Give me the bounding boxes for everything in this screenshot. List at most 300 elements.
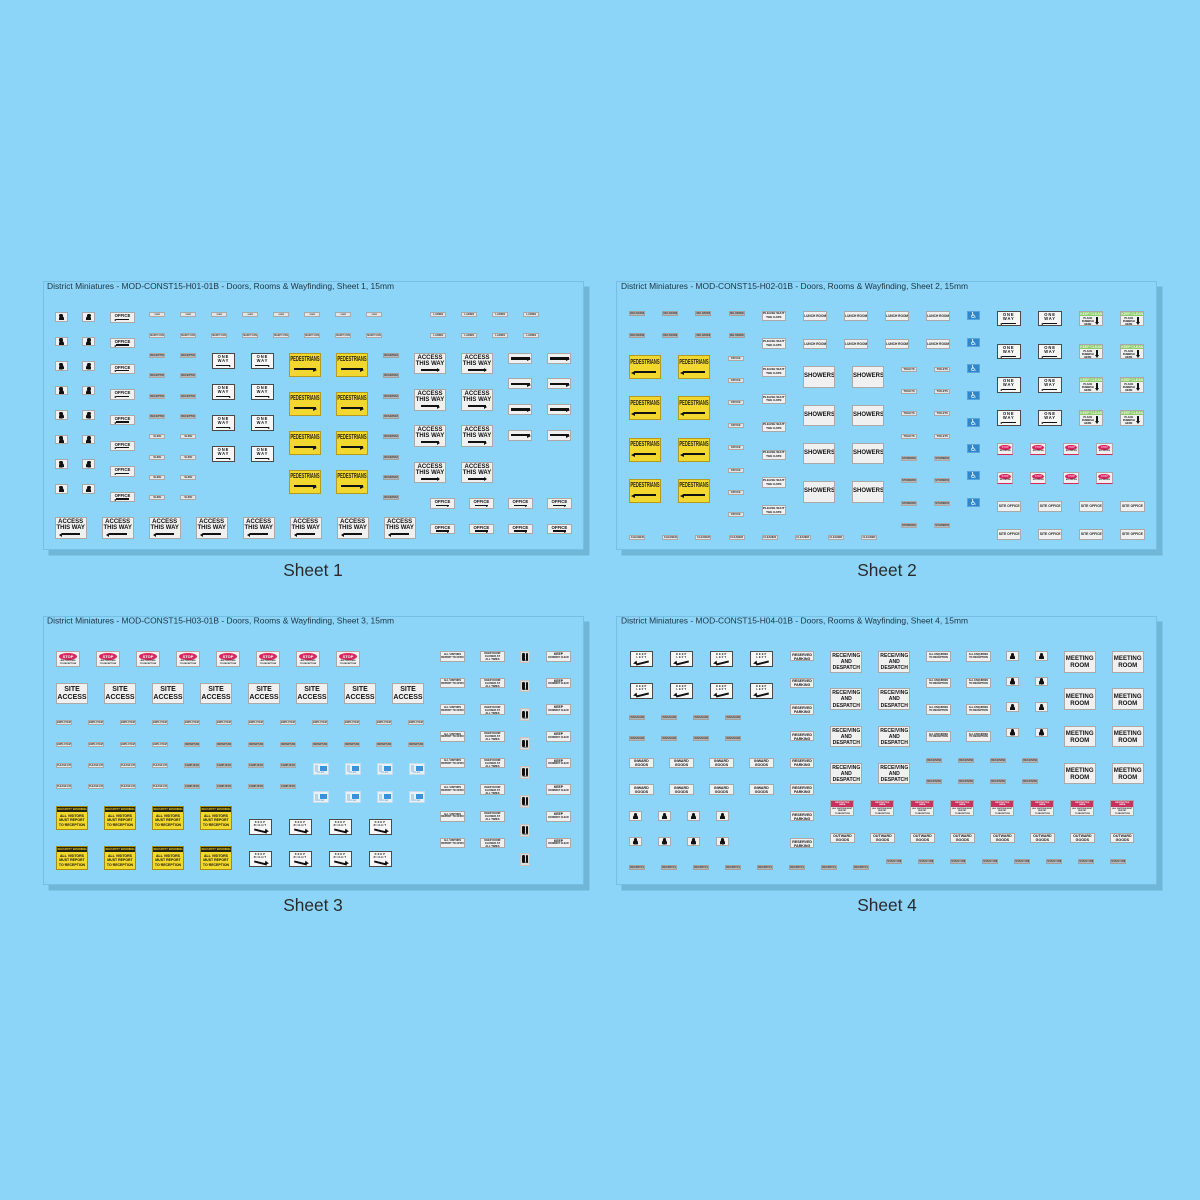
all enquiries signs xyxy=(926,651,991,742)
sheet 4 title: District Miniatures - MOD-CONST15-H04-01B - Doors, Rooms & Wayfinding, Sheet 4, 15mm xyxy=(620,616,968,626)
all enquiries signs: TO RECEPTION xyxy=(929,656,948,658)
toilets and storeroom labels: TOILETS xyxy=(937,390,948,393)
despatch labels: DESPATCH xyxy=(758,866,773,869)
keep doorway clear signs: KEEP xyxy=(554,679,563,683)
lunch room signs: LUNCH ROOM xyxy=(927,342,949,346)
keep door closed signs: CLOSED AT xyxy=(485,842,500,845)
office labels: OFFICE xyxy=(731,357,741,360)
meeting room signs: ROOM xyxy=(1070,700,1089,707)
keep clean signs: RUBBISH xyxy=(1082,386,1094,389)
restricted area signs: REPORT xyxy=(878,810,886,812)
tiny employees labels: EMPLOYEES xyxy=(345,721,360,724)
site access signs: ACCESS xyxy=(201,694,231,701)
site office signs: SITE OFFICE xyxy=(1122,504,1143,508)
site access signs: SITE xyxy=(160,686,176,693)
reserved labels: RESERVED xyxy=(384,374,399,377)
tiny employees labels: DEPARTURE xyxy=(313,743,328,746)
site access signs: SITE xyxy=(256,686,272,693)
office labels: OFFICE xyxy=(731,469,741,472)
inward goods signs: INWARD xyxy=(754,786,769,790)
person signs, upper right: STAFF xyxy=(1011,659,1015,660)
small stop signs: STOP xyxy=(1101,446,1108,449)
inward goods signs: INWARD xyxy=(674,786,689,790)
keep clean signs: HERE xyxy=(1084,323,1091,326)
stop signs: ALL VISITORS xyxy=(60,660,76,662)
stop signs: STOP xyxy=(263,654,273,659)
inward goods signs: INWARD xyxy=(634,759,649,763)
pedestrians signs, right arrow: PEDESTRIANS xyxy=(291,471,320,480)
site access signs: ACCESS xyxy=(393,694,423,701)
please shut the gate signs: PLEASE SHUT xyxy=(763,450,785,454)
receiving labels: RECEIVING xyxy=(1023,759,1038,762)
meeting room signs: MEETING xyxy=(1066,693,1094,700)
site access signs: ACCESS xyxy=(153,694,183,701)
toilets and storeroom labels: TOILETS xyxy=(937,368,948,371)
showers signs: SHOWERS xyxy=(853,450,884,456)
office signs, left arrow: OFFICE xyxy=(115,493,130,498)
ladies labels: LADIES xyxy=(464,334,474,337)
keep door closed signs: CLOSED AT xyxy=(485,682,500,685)
all enquiries signs: TO RECEPTION xyxy=(929,709,948,712)
all enquiries signs: ALL ENQUIRIES xyxy=(929,653,948,656)
all enquiries signs: ALL ENQUIRIES xyxy=(969,733,988,736)
one way signs, right arrow xyxy=(212,353,274,462)
small stop signs: STOP xyxy=(1035,475,1042,478)
all visitors signs: ALL VISITORS xyxy=(444,733,461,736)
toilets and storeroom labels: TOILETS xyxy=(903,390,915,393)
tiny door labels: STAFF xyxy=(216,314,222,316)
office labels xyxy=(728,356,744,517)
please shut the gate signs: PLEASE SHUT xyxy=(763,395,785,399)
small stop signs: ALL VISITORS xyxy=(1066,451,1077,452)
small stop signs: ALL VISITORS xyxy=(1000,451,1011,452)
one way signs, right arrow: WAY xyxy=(218,451,229,456)
one way signs, left arrow: WAY xyxy=(1003,382,1015,387)
inward goods signs: GOODS xyxy=(635,763,648,767)
receiving and despatch signs: AND xyxy=(841,696,852,702)
security warning signs: SECURITY WARNING xyxy=(201,847,231,851)
icon: toilet figure signs: TOILETS xyxy=(522,661,528,662)
one way signs, left arrow: WAY xyxy=(1003,415,1015,420)
blue map signs: SITE MAP xyxy=(349,773,356,774)
one way signs, left arrow: ONE xyxy=(1003,378,1015,383)
keep right signs: RIGHT xyxy=(334,856,347,859)
security warning signs: TO RECEPTION xyxy=(59,863,85,867)
pedestrians signs, right arrow: PEDESTRIANS xyxy=(291,432,320,441)
one way signs, left arrow: ONE xyxy=(1044,378,1056,383)
showers signs: SHOWERS xyxy=(804,450,835,456)
tiny door labels: KEEP OUT xyxy=(370,312,379,314)
keep doorway clear signs: KEEP xyxy=(554,812,563,816)
stop signs: TO RECEPTION xyxy=(220,663,236,665)
keep left signs: LEFT xyxy=(716,656,727,659)
cleaner labels xyxy=(629,535,877,540)
tiny door labels: KEEP OUT xyxy=(215,312,224,314)
security warning signs: ALL VISITORS xyxy=(156,854,180,858)
outward goods signs xyxy=(830,833,1134,843)
restricted area signs: TO RECEPTION xyxy=(835,813,850,815)
keep clean signs: KEEP CLEAN xyxy=(1080,345,1102,349)
office signs, right arrow: OFFICE xyxy=(552,499,567,504)
manager labels xyxy=(629,715,741,741)
please shut the gate signs: PLEASE SHUT xyxy=(763,422,785,426)
please shut the gate signs: THE GATE xyxy=(766,510,782,514)
outward goods signs: OUTWARD xyxy=(873,834,892,838)
receiving and despatch signs: AND xyxy=(889,771,900,777)
pedestrians signs, right arrow: PEDESTRIANS xyxy=(338,471,367,480)
reception and slide labels: SLIDE xyxy=(184,435,192,438)
keep right signs: RIGHT xyxy=(294,824,307,827)
please shut the gate signs: PLEASE SHUT xyxy=(763,311,785,315)
please shut the gate signs: THE GATE xyxy=(766,454,782,458)
access this way signs, left arrow: ACCESS xyxy=(293,519,318,525)
tiny employees labels: EMPLOYEES xyxy=(57,721,72,724)
one way signs, right arrow: ONE xyxy=(257,447,268,452)
keep doorway clear signs: KEEP xyxy=(554,732,563,736)
security warning signs: MUST REPORT xyxy=(155,858,181,862)
pedestrians signs, right arrow: PEDESTRIANS xyxy=(338,393,367,402)
site office signs: SITE OFFICE xyxy=(1122,532,1143,536)
access this way signs, right arrow: ACCESS xyxy=(464,355,490,361)
keep clean signs: KEEP CLEAN xyxy=(1080,312,1102,316)
please shut the gate signs xyxy=(762,311,786,515)
meeting room signs: MEETING xyxy=(1114,730,1142,737)
site access signs: ACCESS xyxy=(57,694,87,701)
please shut the gate signs: PLEASE SHUT xyxy=(763,367,785,371)
keep clean signs: PLACE xyxy=(1124,383,1133,386)
stop signs: TO RECEPTION xyxy=(100,663,116,665)
site access signs: SITE xyxy=(112,686,128,693)
all enquiries signs: ALL ENQUIRIES xyxy=(969,679,988,682)
receiving and despatch signs: RECEIVING xyxy=(832,690,860,696)
access this way signs, left arrow: ACCESS xyxy=(340,519,365,525)
all visitors signs: ALL VISITORS xyxy=(444,839,461,842)
site access signs: SITE xyxy=(64,686,80,693)
reserved labels: RESERVED xyxy=(384,415,399,418)
please shut the gate signs: THE GATE xyxy=(766,371,782,375)
security warning signs: MUST REPORT xyxy=(59,818,85,822)
receiving and despatch signs: AND xyxy=(841,734,852,740)
pedestrians signs, left arrow: PEDESTRIANS xyxy=(680,357,709,366)
office signs, right arrow: OFFICE xyxy=(513,525,528,530)
one way signs, right arrow: ONE xyxy=(218,416,229,421)
restricted area signs: ALL VISITORS MUST xyxy=(912,808,932,810)
meeting room signs: MEETING xyxy=(1114,767,1142,774)
one way signs, right arrow: WAY xyxy=(257,420,268,425)
security warning signs: MUST REPORT xyxy=(107,858,133,862)
keep clean signs xyxy=(1079,311,1144,426)
icon: wheelchair signs xyxy=(967,311,980,507)
keep doorway clear signs: DOORWAY CLEAR xyxy=(548,817,569,819)
inward goods signs: INWARD xyxy=(674,759,689,763)
showers signs: SHOWERS xyxy=(853,488,884,494)
reserved labels xyxy=(383,353,399,500)
site office signs: SITE OFFICE xyxy=(1081,532,1102,536)
restricted area signs: AREA xyxy=(1039,804,1045,806)
office signs, left arrow: OFFICE xyxy=(115,390,130,395)
one way signs, right arrow: ONE xyxy=(218,354,229,359)
blue map signs: SITE MAP xyxy=(317,773,324,774)
reserved parking signs: PARKING xyxy=(794,763,810,767)
despatch labels: DESPATCH xyxy=(726,866,741,869)
restricted area signs: ALL VISITORS MUST xyxy=(832,808,852,810)
reception and slide labels: SLIDE xyxy=(153,476,161,479)
sheet 2 title: District Miniatures - MOD-CONST15-H02-01B - Doors, Rooms & Wayfinding, Sheet 2, 15mm xyxy=(620,281,968,291)
icon: toilet figure signs: TOILETS xyxy=(522,806,528,807)
outward goods signs: OUTWARD xyxy=(993,834,1012,838)
showers signs: SHOWERS xyxy=(853,412,884,418)
keep left signs: KEEP xyxy=(636,685,647,688)
one way signs, right arrow: ONE xyxy=(257,416,268,421)
icon: toilet figure signs: TOILETS xyxy=(522,777,528,778)
one way signs, left arrow xyxy=(997,311,1062,426)
one way signs, left arrow: ONE xyxy=(1003,345,1015,350)
site access signs: SITE xyxy=(352,686,368,693)
one way signs, left arrow: WAY xyxy=(1044,382,1056,387)
keep left signs: KEEP xyxy=(756,653,767,656)
lunch room signs: LUNCH ROOM xyxy=(845,342,867,346)
access this way signs, right arrow: ACCESS xyxy=(464,391,490,397)
office labels: OFFICE xyxy=(731,491,741,494)
stop signs: STOP xyxy=(223,654,233,659)
tiny door labels: KEEP OUT xyxy=(184,312,193,314)
site access signs: SITE xyxy=(400,686,416,693)
security warning signs: MUST REPORT xyxy=(203,858,229,862)
reserved parking signs: RESERVED xyxy=(792,733,812,737)
restricted area signs: AREA xyxy=(999,804,1005,806)
reserved labels: RESERVED xyxy=(384,476,399,479)
one way signs, right arrow: ONE xyxy=(218,447,229,452)
inward goods signs: INWARD xyxy=(714,786,729,790)
keep left signs: KEEP xyxy=(676,653,687,656)
all enquiries signs: ALL ENQUIRIES xyxy=(929,733,948,736)
one way signs, right arrow: ONE xyxy=(218,385,229,390)
keep door closed signs: ALL TIMES xyxy=(485,712,500,715)
office signs, right arrow xyxy=(430,498,572,534)
keep door closed signs xyxy=(480,651,505,848)
keep door closed signs: CLOSED AT xyxy=(485,655,500,658)
office signs, right arrow: OFFICE xyxy=(435,525,450,530)
keep left signs: KEEP xyxy=(636,653,647,656)
person signs, upper right: STAFF xyxy=(1011,685,1015,686)
restricted area signs: TO RECEPTION xyxy=(875,813,890,815)
access this way signs, right arrow: ACCESS xyxy=(417,355,442,361)
blue map signs: SITE MAP xyxy=(381,773,388,774)
icon: wheelchair signs: ♿ xyxy=(970,498,977,507)
receiving labels: RECEIVING xyxy=(959,759,974,762)
access this way signs, right arrow: ACCESS xyxy=(417,391,442,397)
one way signs, right arrow: WAY xyxy=(257,358,268,363)
receiving labels xyxy=(926,758,1038,784)
icon: toilet figure signs: TOILETS xyxy=(522,863,528,864)
access this way signs, left arrow: ACCESS xyxy=(246,519,271,525)
keep clean signs: RUBBISH xyxy=(1123,386,1135,389)
keep door closed signs: CLOSED AT xyxy=(485,815,500,818)
despatch labels xyxy=(629,865,869,870)
stop signs: TO RECEPTION xyxy=(140,663,156,665)
access this way signs, left arrow: THIS WAY xyxy=(385,525,414,531)
restricted area signs: RESTRICTED xyxy=(1115,802,1129,804)
lunch room signs: LUNCH ROOM xyxy=(886,314,908,318)
keep clean signs: RUBBISH xyxy=(1082,353,1094,356)
manager labels: MANAGER xyxy=(630,737,644,740)
restricted area signs xyxy=(830,800,1134,816)
keep doorway clear signs: DOORWAY CLEAR xyxy=(548,843,569,845)
keep clean signs: HERE xyxy=(1084,422,1091,425)
reserved parking signs: PARKING xyxy=(794,710,810,714)
receiving labels: RECEIVING xyxy=(927,759,942,762)
person signs, lower left: STAFF xyxy=(720,819,725,820)
all enquiries signs: ALL ENQUIRIES xyxy=(929,679,948,682)
keep clean signs: HERE xyxy=(1125,422,1132,425)
keep doorway clear signs: DOORWAY CLEAR xyxy=(548,683,569,685)
receiving and despatch signs: DESPATCH xyxy=(881,740,908,746)
all visitors signs: ALL VISITORS xyxy=(444,786,461,789)
one way signs, right arrow: WAY xyxy=(218,358,229,363)
stop signs: TO RECEPTION xyxy=(60,663,76,665)
restricted area signs: TO RECEPTION xyxy=(915,813,930,815)
all enquiries signs: TO RECEPTION xyxy=(969,709,988,712)
reserved labels: RESERVED xyxy=(384,435,399,438)
despatch labels: DESPATCH xyxy=(822,866,837,869)
access this way signs, right arrow: ACCESS xyxy=(464,427,490,433)
reserved labels: RESERVED xyxy=(384,496,399,499)
access this way signs, left arrow: THIS WAY xyxy=(150,525,179,531)
restricted area signs: REPORT xyxy=(838,810,846,812)
small stop signs: STOP xyxy=(1002,475,1009,478)
ladies labels xyxy=(430,312,539,338)
please shut the gate signs: THE GATE xyxy=(766,315,782,319)
restricted area signs: REPORT xyxy=(998,810,1006,812)
lunch room signs: LUNCH ROOM xyxy=(804,314,826,318)
tiny employees labels: EMPLOYEES xyxy=(185,721,200,724)
all visitors signs: ALL VISITORS xyxy=(444,813,461,816)
inward goods signs: GOODS xyxy=(715,763,728,767)
restricted area signs: ALL VISITORS MUST xyxy=(1032,808,1052,810)
caption: sheet 4: Sheet 4 xyxy=(857,895,917,915)
ladies labels: LADIES xyxy=(495,334,505,337)
keep right signs: KEEP xyxy=(255,821,266,824)
access this way signs, left arrow xyxy=(55,517,416,539)
stop signs: TO RECEPTION xyxy=(180,663,196,665)
keep clean signs: HERE xyxy=(1084,389,1091,392)
lunch room signs: LUNCH ROOM xyxy=(927,314,949,318)
small stop signs: ALL VISITORS xyxy=(1066,480,1077,481)
site access signs: SITE xyxy=(304,686,320,693)
keep clean signs: PLACE xyxy=(1083,416,1092,419)
all enquiries signs: ALL ENQUIRIES xyxy=(969,653,988,656)
reception and slide labels xyxy=(149,353,196,500)
ladies labels: LADIES xyxy=(495,313,505,316)
office labels: OFFICE xyxy=(731,446,741,449)
keep clean signs: HERE xyxy=(1125,323,1132,326)
tiny employees labels: EMPLOYEES xyxy=(121,721,136,724)
person signs, upper right: STAFF xyxy=(1039,736,1044,737)
person signs, lower left: STAFF xyxy=(720,845,725,846)
tiny employees labels: EMPLOYEES xyxy=(121,743,136,746)
security warning signs: SECURITY WARNING xyxy=(153,807,183,811)
meeting room signs: MEETING xyxy=(1114,693,1142,700)
keep right signs: KEEP xyxy=(335,821,346,824)
meeting room signs: ROOM xyxy=(1118,774,1137,781)
please shut the gate signs: THE GATE xyxy=(766,482,782,486)
person signs: STAFF xyxy=(59,394,63,395)
security warning signs: SECURITY WARNING xyxy=(57,847,87,851)
keep right signs: KEEP xyxy=(295,853,306,856)
tiny door labels: STAFF xyxy=(340,314,346,316)
receiving and despatch signs: RECEIVING xyxy=(880,728,908,734)
inward goods signs: GOODS xyxy=(675,763,688,767)
keep left signs: KEEP xyxy=(716,653,727,656)
blue map signs xyxy=(313,763,425,803)
security warning signs: SECURITY WARNING xyxy=(201,807,231,811)
tiny employees labels: EMPLOYEES xyxy=(217,721,232,724)
one way signs, left arrow: WAY xyxy=(1003,316,1015,321)
person signs, lower left: STAFF xyxy=(662,819,667,820)
keep clean signs: HERE xyxy=(1125,389,1132,392)
office labels: OFFICE xyxy=(731,401,741,404)
reception and slide labels: SLIDE xyxy=(184,496,192,499)
keep right signs: RIGHT xyxy=(254,856,267,859)
restricted area signs: AREA xyxy=(879,804,885,806)
person signs: STAFF xyxy=(87,345,91,346)
inward goods signs: INWARD xyxy=(634,786,649,790)
keep left signs: KEEP xyxy=(716,685,727,688)
tiny employees labels: DEPARTURE xyxy=(249,743,264,746)
keep doorway clear signs: KEEP xyxy=(554,705,563,709)
please shut the gate signs: THE GATE xyxy=(766,426,782,430)
tiny employees labels: DEPARTURE xyxy=(281,743,296,746)
keep left signs: KEEP xyxy=(676,685,687,688)
reception and slide labels: SLIDE xyxy=(184,476,192,479)
keep right signs: KEEP xyxy=(375,821,386,824)
site access signs: ACCESS xyxy=(249,694,279,701)
toilets and storeroom labels: TOILETS xyxy=(903,412,915,415)
please shut the gate signs: THE GATE xyxy=(766,343,782,347)
small stop signs: STOP xyxy=(1002,446,1009,449)
keep left signs: LEFT xyxy=(756,656,767,659)
all visitors signs: ALL VISITORS xyxy=(444,679,461,682)
icon: toilet figure signs: TOILETS xyxy=(522,748,528,749)
cleaner labels: CLEANER xyxy=(862,536,875,539)
access this way signs, right arrow xyxy=(414,353,493,483)
keep right signs: RIGHT xyxy=(294,856,307,859)
site office signs: SITE OFFICE xyxy=(1081,504,1102,508)
one way signs, right arrow: WAY xyxy=(218,420,229,425)
security warning signs: ALL VISITORS xyxy=(60,854,84,858)
access this way signs, right arrow: THIS WAY xyxy=(463,470,491,476)
please shut the gate signs: PLEASE SHUT xyxy=(763,478,785,482)
security warning signs xyxy=(56,806,232,870)
tiny employees labels: EMPLOYEES xyxy=(57,743,72,746)
restricted area signs: ALL VISITORS MUST xyxy=(1112,808,1132,810)
despatch labels: DESPATCH xyxy=(630,866,645,869)
keep door closed signs: ALL TIMES xyxy=(485,658,500,661)
access this way signs, left arrow: THIS WAY xyxy=(338,525,367,531)
showers signs: SHOWERS xyxy=(804,412,835,418)
keep right signs: KEEP xyxy=(375,853,386,856)
reserved parking signs: RESERVED xyxy=(792,813,812,817)
security warning signs: TO RECEPTION xyxy=(59,823,85,827)
person signs, upper right: STAFF xyxy=(1039,685,1044,686)
reception and slide labels: SLIDE xyxy=(184,456,192,459)
panel: sheet 1 xyxy=(43,281,584,550)
restricted area signs: RESTRICTED xyxy=(955,802,969,804)
access this way signs, right arrow: THIS WAY xyxy=(416,397,444,403)
tiny door labels: STAFF xyxy=(154,314,160,316)
keep right signs: RIGHT xyxy=(374,824,387,827)
outward goods signs: OUTWARD xyxy=(1033,834,1052,838)
